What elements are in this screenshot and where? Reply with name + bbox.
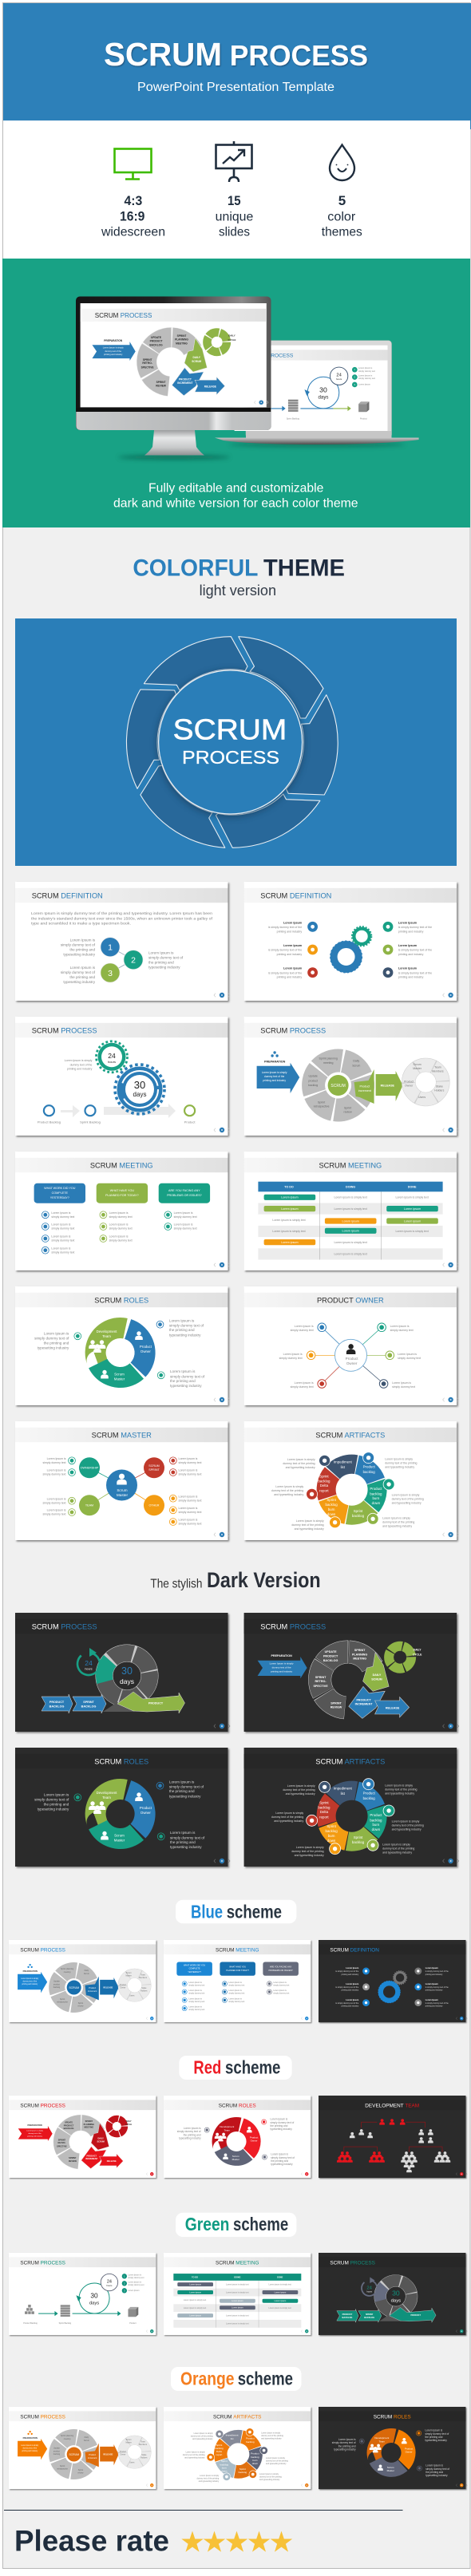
master hub diagram: Lorem Ipsum is [179, 1507, 198, 1510]
master hub diagram: Lorem Ipsum is [47, 1497, 66, 1500]
green slide: process 30 days [9, 2253, 157, 2336]
gears diagram [335, 1966, 449, 2008]
red slide: process cycle [9, 2096, 157, 2179]
artifacts ring [271, 1452, 424, 1531]
slide title: SCRUM ARTIFACTS [315, 1758, 385, 1766]
scheme label: red: scheme [225, 2056, 280, 2077]
master hub diagram: Master [117, 1493, 128, 1497]
slide title: SCRUM MEETING [216, 1947, 259, 1953]
scheme label: orange: scheme [238, 2368, 293, 2388]
slide: scrum meeting questions [15, 1152, 230, 1272]
team hierarchy [337, 2119, 450, 2172]
scheme label: green: Green [185, 2214, 229, 2234]
slide title: SCRUM DEFINITION [32, 892, 103, 900]
blue slide: definition gears dark [319, 1940, 467, 2023]
hero slide: scrum process ring [15, 618, 457, 866]
ring label [173, 713, 287, 768]
blue slide: process wheel [9, 1940, 157, 2023]
red slide: development team dark [319, 2096, 467, 2179]
slide: scrum definition gears [244, 882, 459, 1002]
dark slide: scrum process cycle [244, 1613, 459, 1733]
scheme label: red: Red [193, 2056, 221, 2077]
slide title: SCRUM PROCESS [260, 1027, 326, 1035]
slide title: SCRUM ROLES [94, 1758, 148, 1766]
caption: dark and white version for each color theme [113, 497, 358, 511]
process gears diagram: Product [184, 1120, 196, 1124]
wheel diagram [257, 1050, 445, 1120]
hub and spokes diagram [279, 1323, 421, 1389]
scheme label: blue: Blue [191, 1901, 223, 1922]
slide: scrum meeting table [244, 1152, 459, 1272]
stats section [3, 121, 470, 259]
slide title: SCRUM ROLES [374, 2414, 411, 2420]
icon: smiling drop [330, 145, 354, 180]
master hub diagram: Lorem Ipsum is [179, 1519, 198, 1522]
body text: Lorem Ipsum is [148, 951, 174, 955]
icon: presentation board [216, 141, 252, 182]
process gears diagram: Lorem Ipsum is simply [65, 1059, 93, 1062]
heading: dark version: Dark Version [207, 1568, 321, 1592]
heading: colorful theme: light version [200, 583, 276, 599]
slide title: SCRUM PROCESS [20, 1947, 65, 1953]
slide title: SCRUM MEETING [319, 1162, 382, 1170]
slide title: SCRUM PROCESS [32, 1623, 97, 1631]
caption [113, 482, 358, 511]
scheme label: orange: Orange [180, 2368, 235, 2388]
stat: themes: themes [322, 226, 362, 239]
body text: typesetting industry [63, 980, 96, 984]
stat: slides [216, 193, 253, 239]
slide: scrum artifacts [244, 1421, 459, 1542]
call to action: please rate: Please rate [14, 2525, 169, 2558]
dark slide: scrum process arrows [15, 1613, 230, 1733]
orange slide: process wheel [9, 2407, 157, 2490]
master hub diagram: Scrum [117, 1488, 128, 1492]
scheme label: blue [176, 1900, 296, 1923]
master hub diagram: SCRUM [148, 1464, 160, 1468]
slide title: DEVELOPMENT TEAM [365, 2103, 419, 2108]
cycle diagram [258, 1641, 422, 1719]
hub and spokes diagram: simply dummy text [291, 1329, 314, 1332]
scheme label: blue: scheme [227, 1901, 282, 1922]
master hub diagram: Lorem Ipsum is [179, 1457, 198, 1460]
caption: Fully editable and customizable [148, 482, 323, 496]
heading: colorful theme: COLORFUL [133, 555, 258, 582]
slide title: SCRUM ARTIFACTS [213, 2414, 261, 2420]
master hub diagram: Lorem Ipsum is [47, 1469, 66, 1472]
process ring with arrows [42, 1644, 185, 1713]
hub and spokes diagram: Lorem Ipsum is [390, 1325, 410, 1328]
scheme label: orange [171, 2367, 302, 2391]
gears diagram [268, 921, 432, 979]
body text: the printing and [148, 961, 174, 965]
body text: the printing and [69, 975, 95, 979]
dark slide: scrum artifacts [244, 1748, 459, 1868]
master hub diagram: OWNERSHIP [81, 1467, 99, 1470]
process gears diagram: days [133, 1091, 146, 1098]
hub and spokes diagram: Lorem Ipsum is [283, 1353, 303, 1356]
question cards [176, 1962, 299, 2011]
cycle diagram [18, 2115, 133, 2169]
body text: the industry's standard dummy text ever since the 1500s, when an unknown printer took a galley of [31, 916, 213, 920]
scheme label: green: scheme [233, 2214, 288, 2234]
slide title: SCRUM DEFINITION [330, 1947, 379, 1953]
body text: typesetting industry [148, 966, 180, 970]
title: SCRUM PROCESS [104, 36, 368, 73]
slide: scrum master [15, 1421, 230, 1542]
slide title: SCRUM ROLES [219, 2103, 256, 2108]
body text: the printing and [69, 948, 95, 952]
kanban table [258, 1182, 443, 1259]
scheme label: green [176, 2213, 296, 2237]
heading: dark version [150, 1568, 321, 1592]
slide title: SCRUM PROCESS [20, 2414, 65, 2420]
red slide: roles [164, 2096, 312, 2179]
slide: scrum process gears [15, 1017, 230, 1137]
slide title: SCRUM ROLES [94, 1297, 148, 1305]
kanban table [173, 2274, 301, 2328]
slide title: SCRUM PROCESS [260, 1623, 326, 1631]
process gears diagram: Sprint Backlog [80, 1120, 101, 1124]
five star rating [181, 2531, 292, 2552]
master hub diagram: Lorem Ipsum is [179, 1469, 198, 1472]
scheme label: red [179, 2056, 292, 2080]
artifacts ring [183, 2428, 288, 2483]
body text: type and scrambled it to make a type specimen book. [31, 921, 131, 925]
artifacts ring [271, 1779, 424, 1857]
laptop mockup [215, 341, 419, 447]
master hub diagram: OTHER [149, 1504, 160, 1507]
hub and spokes diagram: simply dummy text [398, 1357, 421, 1360]
green feature band [2, 259, 470, 527]
stat: slides: 15 [228, 193, 241, 208]
ring of six arrows [126, 637, 338, 847]
laptop mockup: SCRUM PROCESS [247, 354, 294, 359]
stat: formats: 4:3 [125, 193, 142, 208]
numbered circles: 2 [131, 956, 136, 966]
ring label: PROCESS [182, 747, 279, 768]
stat: formats: widescreen [101, 226, 165, 239]
hub and spokes diagram: Lorem Ipsum is [295, 1381, 314, 1385]
slide: scrum process wheel [244, 1017, 459, 1137]
master hub diagram: simply dummy text [179, 1473, 202, 1476]
green slide: process arrows dark [319, 2253, 467, 2336]
master hub diagram: Lorem Ipsum is [47, 1509, 66, 1512]
master hub diagram: simply dummy text [179, 1499, 202, 1502]
master hub diagram: simply dummy text [179, 1511, 202, 1514]
master hub diagram: SPRINT [148, 1468, 160, 1472]
heading: colorful theme [133, 555, 345, 599]
numbered circles [101, 938, 143, 982]
master hub diagram: simply dummy text [179, 1461, 202, 1464]
master hub diagram: simply dummy text [179, 1523, 202, 1526]
heading: dark version: The stylish [150, 1577, 202, 1590]
numbered circles: 1 [108, 943, 113, 953]
process gears diagram: 30 [134, 1079, 145, 1091]
slide title: SCRUM PROCESS [20, 2260, 65, 2266]
master hub diagram: simply dummy text [43, 1473, 66, 1476]
body text: simply dummy text of [61, 970, 96, 974]
ring label: SCRUM [173, 713, 287, 746]
slide title: SCRUM MASTER [92, 1432, 152, 1440]
slide title: SCRUM MEETING [216, 2260, 259, 2266]
numbered circles: 3 [108, 969, 113, 978]
heading: colorful theme: THEME [263, 555, 345, 582]
master hub diagram: simply dummy text [43, 1513, 66, 1516]
body text: Lorem Ipsum is simply dummy text of the printing and typesetting industry. Lorem Ipsum has been [31, 911, 212, 915]
master hub diagram [43, 1457, 202, 1526]
slide title: SCRUM DEFINITION [260, 892, 331, 900]
hub and spokes diagram: simply dummy text [279, 1357, 303, 1360]
orange slide: artifacts [164, 2407, 312, 2490]
master hub diagram: TEAM [85, 1504, 93, 1507]
body text: Lorem Ipsum is [70, 966, 96, 970]
icon: monitor [115, 148, 152, 179]
process ring with arrows [337, 2274, 436, 2322]
body text [31, 911, 213, 984]
hub and spokes diagram: Owner [346, 1361, 358, 1365]
master hub diagram: simply dummy text [43, 1501, 66, 1504]
wheel diagram [18, 1963, 148, 2012]
desktop monitor mockup: SCRUM PROCESS [95, 312, 152, 319]
roles ring [332, 2428, 449, 2477]
process gears diagram: Product Backlog [38, 1120, 61, 1124]
hub and spokes diagram: Lorem Ipsum is [392, 1381, 411, 1385]
process gears diagram: hours [108, 1060, 116, 1064]
stat: themes: 5 [338, 193, 346, 208]
stat: themes: color [327, 211, 355, 224]
slide title: PRODUCT OWNER [317, 1297, 384, 1305]
hub and spokes diagram: simply dummy text [291, 1385, 314, 1389]
hub and spokes diagram: simply dummy text [390, 1329, 414, 1332]
subtitle: PowerPoint Presentation Template [137, 81, 334, 94]
stat: slides: slides [219, 226, 250, 239]
orange slide: roles dark [319, 2407, 467, 2490]
slide: scrum roles [15, 1286, 230, 1407]
slide title: SCRUM MEETING [90, 1162, 153, 1170]
stat: formats: 16:9 [120, 209, 144, 224]
header banner [3, 3, 471, 129]
dark slide: scrum roles [15, 1748, 230, 1868]
slide title: SCRUM PROCESS [20, 2103, 65, 2108]
roles ring [34, 1779, 205, 1849]
30 days diagram [23, 2274, 144, 2325]
hub and spokes diagram: Lorem Ipsum is [398, 1353, 417, 1356]
master hub diagram: Lorem Ipsum is [47, 1457, 66, 1460]
process gears diagram: printing and industry [67, 1068, 93, 1071]
body text: simply dummy text of [61, 943, 96, 947]
wheel diagram [18, 2430, 148, 2479]
process gears diagram: 24 [108, 1052, 116, 1060]
process gears diagram: dummy text of the [70, 1063, 92, 1066]
master hub diagram: Lorem Ipsum is [179, 1495, 198, 1498]
body text: simply dummy text of [148, 956, 184, 960]
process gears diagram [38, 1041, 196, 1124]
desktop monitor mockup [76, 297, 271, 460]
roles ring [34, 1318, 205, 1388]
body text: typesetting industry [63, 953, 96, 957]
slide title: SCRUM ARTIFACTS [315, 1432, 385, 1440]
green slide: meeting table [164, 2253, 312, 2336]
slide: scrum definition numbered [15, 882, 230, 1002]
hub and spokes diagram: Product [346, 1357, 358, 1361]
hub and spokes diagram: Lorem Ipsum is [295, 1325, 314, 1328]
question cards [34, 1183, 210, 1254]
stat: slides: unique [216, 211, 253, 224]
stat: formats [101, 193, 165, 239]
master hub diagram: simply dummy text [43, 1461, 66, 1464]
slide title: SCRUM PROCESS [330, 2260, 375, 2266]
slide title: SCRUM PROCESS [32, 1027, 97, 1035]
roles ring [177, 2117, 295, 2166]
stat: themes [322, 193, 362, 239]
body text: Lorem Ipsum is [70, 938, 96, 942]
slide: product owner [244, 1286, 459, 1407]
blue slide: meeting questions [164, 1940, 312, 2023]
hub and spokes diagram: simply dummy text [392, 1385, 415, 1389]
